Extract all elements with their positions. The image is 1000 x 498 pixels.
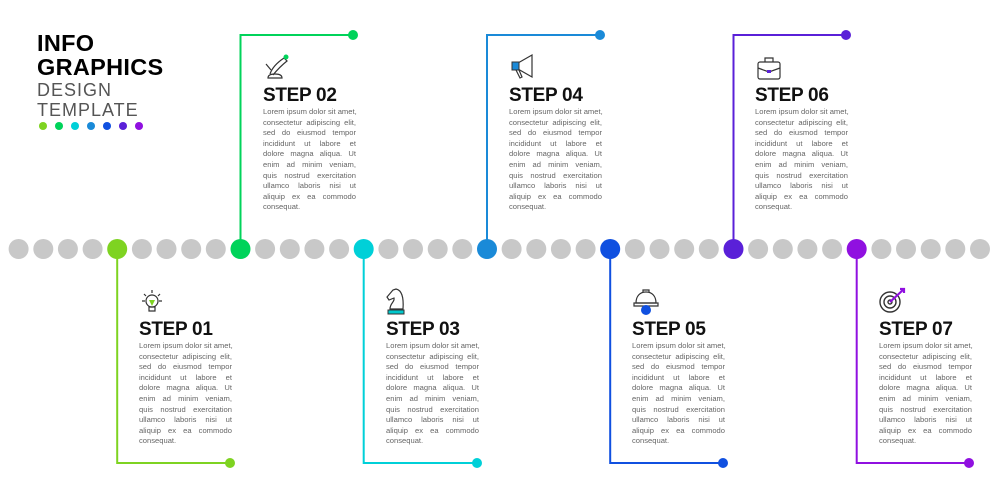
text: incididunt ut labore et [386,373,479,382]
text: aliquip ex ea commodo [263,192,356,201]
step 04: STEP 04 [509,85,583,106]
text: ullamco laboris nisi ut [263,181,356,190]
text: enim ad minim veniam, [139,394,232,403]
text: consequat. [632,436,669,445]
step 06: STEP 06 [755,85,829,106]
text: enim ad minim veniam, [386,394,479,403]
text: ullamco laboris nisi ut [386,415,479,424]
title [37,30,163,120]
title: DESIGN [37,80,112,100]
text: enim ad minim veniam, [879,394,972,403]
text: Lorem ipsum dolor sit amet, [263,107,357,116]
text: Lorem ipsum dolor sit amet, [879,341,973,350]
text: enim ad minim veniam, [755,160,848,169]
text: consequat. [879,436,916,445]
text: Lorem ipsum dolor sit amet, [139,341,233,350]
text: dolore magna aliqua. Ut [879,383,972,392]
text: dolore magna aliqua. Ut [139,383,232,392]
text: quis nostrud exercitation [755,171,848,180]
title: TEMPLATE [37,100,139,120]
step 02: STEP 02 [263,85,337,106]
text: ullamco laboris nisi ut [139,415,232,424]
text: enim ad minim veniam, [263,160,356,169]
text: incididunt ut labore et [509,139,602,148]
text: dolore magna aliqua. Ut [755,149,848,158]
text: aliquip ex ea commodo [879,426,972,435]
icon: briefcase [757,57,781,80]
step 01: STEP 01 [139,319,213,340]
text: sed do eiusmod tempor [755,128,848,137]
text: consectetur adipiscing elit, [632,352,725,361]
text: incididunt ut labore et [755,139,848,148]
text: sed do eiusmod tempor [139,362,232,371]
text: enim ad minim veniam, [632,394,725,403]
text: consequat. [509,202,546,211]
text: consectetur adipiscing elit, [386,352,479,361]
icon: megaphone [512,54,533,79]
title: GRAPHICS [37,54,163,80]
text: aliquip ex ea commodo [755,192,848,201]
text: sed do eiusmod tempor [632,362,725,371]
text: dolore magna aliqua. Ut [632,383,725,392]
text: enim ad minim veniam, [509,160,602,169]
text: sed do eiusmod tempor [263,128,356,137]
step 03: STEP 03 [386,319,460,340]
step 05: STEP 05 [632,319,706,340]
text: ullamco laboris nisi ut [632,415,725,424]
text: consectetur adipiscing elit, [139,352,232,361]
text: sed do eiusmod tempor [509,128,602,137]
icon: helmet gear [633,289,659,315]
text: sed do eiusmod tempor [879,362,972,371]
text: dolore magna aliqua. Ut [509,149,602,158]
text: consequat. [139,436,176,445]
icon: microscope [266,54,288,79]
text: quis nostrud exercitation [386,405,479,414]
text: ullamco laboris nisi ut [879,415,972,424]
step 07: STEP 07 [879,319,953,340]
text: Lorem ipsum dolor sit amet, [509,107,603,116]
text: quis nostrud exercitation [139,405,232,414]
text: consequat. [263,202,300,211]
icon: target [879,288,906,313]
icon: chess knight [386,288,404,314]
text: sed do eiusmod tempor [386,362,479,371]
text: incididunt ut labore et [263,139,356,148]
text: consectetur adipiscing elit, [263,118,356,127]
text: quis nostrud exercitation [879,405,972,414]
text: Lorem ipsum dolor sit amet, [755,107,849,116]
text: incididunt ut labore et [632,373,725,382]
text: dolore magna aliqua. Ut [386,383,479,392]
text: incididunt ut labore et [139,373,232,382]
text: quis nostrud exercitation [263,171,356,180]
text: consequat. [755,202,792,211]
text: ullamco laboris nisi ut [509,181,602,190]
text: ullamco laboris nisi ut [755,181,848,190]
text: aliquip ex ea commodo [386,426,479,435]
title: INFO [37,30,94,56]
text: dolore magna aliqua. Ut [263,149,356,158]
text: quis nostrud exercitation [632,405,725,414]
text: aliquip ex ea commodo [509,192,602,201]
text: consectetur adipiscing elit, [509,118,602,127]
icon: light bulb [142,290,162,312]
text: consequat. [386,436,423,445]
text: Lorem ipsum dolor sit amet, [632,341,726,350]
text: quis nostrud exercitation [509,171,602,180]
text: aliquip ex ea commodo [139,426,232,435]
legend dots [39,122,143,130]
text: consectetur adipiscing elit, [755,118,848,127]
text: incididunt ut labore et [879,373,972,382]
text: aliquip ex ea commodo [632,426,725,435]
text: consectetur adipiscing elit, [879,352,972,361]
text: Lorem ipsum dolor sit amet, [386,341,480,350]
